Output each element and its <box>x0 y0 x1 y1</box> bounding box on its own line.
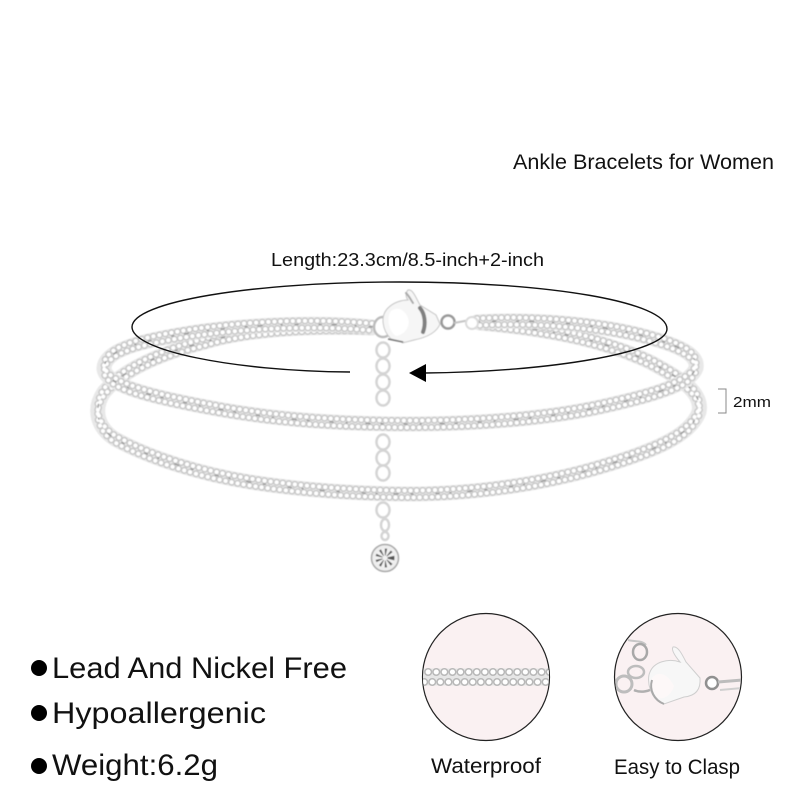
charm <box>372 544 398 572</box>
length arrow ellipse <box>132 282 667 382</box>
feature list: Hypoallergenic <box>52 697 266 730</box>
bullet 1 <box>31 660 47 676</box>
feature list: Weight:6.2g <box>52 749 218 782</box>
infographic canvas <box>31 154 773 781</box>
extender chain <box>376 342 390 540</box>
strand: upper <box>104 318 696 428</box>
feature: waterproof <box>420 614 552 778</box>
2mm bracket: 2mm <box>733 394 771 411</box>
bullet 3 <box>31 758 47 774</box>
feature list <box>31 652 347 782</box>
feature: easy to clasp: Easy to Clasp <box>614 756 740 779</box>
feature: waterproof: Waterproof <box>431 755 541 778</box>
feature: easy to clasp <box>614 614 742 779</box>
bracelet <box>98 290 699 572</box>
title: Ankle Bracelets for Women <box>513 150 774 174</box>
lobster clasp <box>374 290 478 343</box>
bullet 2 <box>31 705 47 721</box>
feature list: Lead And Nickel Free <box>52 652 347 685</box>
length label: Length:23.3cm/8.5-inch+2-inch <box>271 250 544 270</box>
strand: lower <box>98 320 699 498</box>
2mm bracket <box>718 389 771 413</box>
arrowhead <box>409 364 426 382</box>
